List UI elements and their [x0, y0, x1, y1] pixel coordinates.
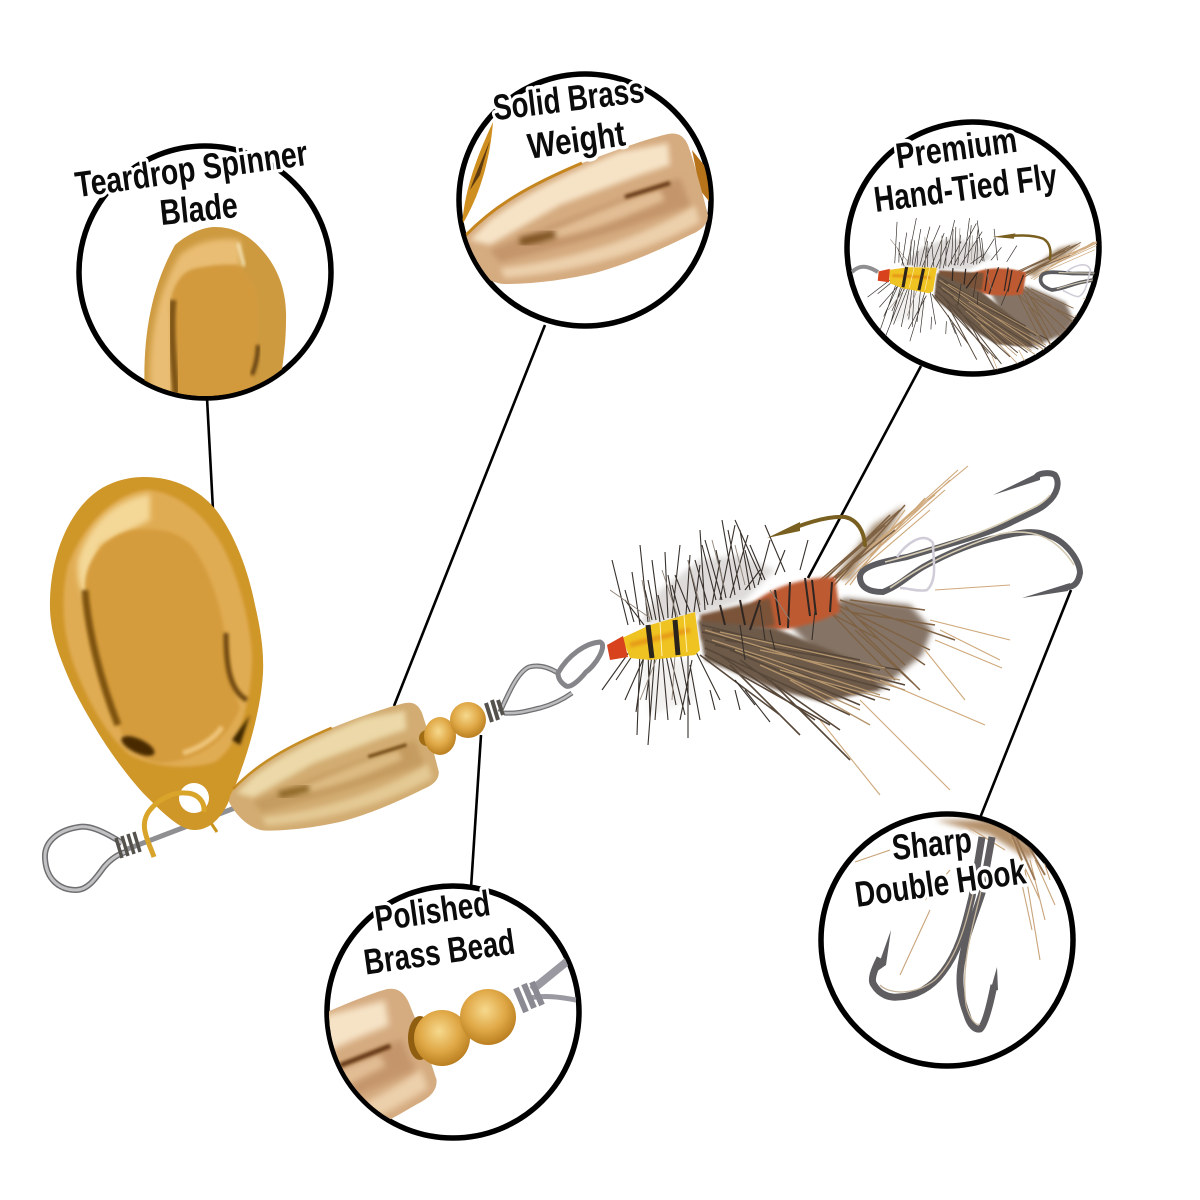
icon: blade close-up [144, 227, 286, 410]
leader line: hook [980, 590, 1071, 818]
icon: snap swivel [486, 642, 603, 722]
label: sharp double hook: Double Hook [852, 850, 1029, 915]
label: polished brass bead: Polished [372, 882, 493, 939]
callout: polished brass bead [324, 883, 582, 1141]
icon: hand-tied fly with double hook [602, 466, 1080, 795]
leader line: blade [207, 398, 213, 510]
label: solid brass weight: Weight [525, 113, 628, 167]
icon: spinner blade [50, 477, 263, 857]
label: sharp double hook [852, 819, 1029, 915]
label: premium hand-tied fly: Hand-Tied Fly [871, 155, 1059, 220]
callout: sharp double hook [821, 814, 1073, 1066]
icon: hook close-up [855, 820, 1055, 1029]
callout: premium hand-tied fly [844, 119, 1102, 377]
label: premium hand-tied fly [871, 119, 1059, 220]
leader line: bead [471, 735, 481, 888]
callout: teardrop spinner blade [73, 132, 331, 410]
label: polished brass bead: Brass Bead [361, 921, 517, 982]
icon: eyelet and shaft wire [45, 806, 240, 890]
label: polished brass bead [361, 882, 517, 982]
callout: solid brass weight [459, 69, 712, 326]
icon: brass beads [419, 702, 486, 755]
label: premium hand-tied fly: Premium [893, 119, 1020, 176]
label: solid brass weight: Solid Brass [491, 69, 646, 128]
label: teardrop spinner blade [73, 132, 310, 233]
leader line: fly [808, 366, 921, 578]
label: teardrop spinner blade: Teardrop Spinner [73, 132, 310, 205]
label: sharp double hook: Sharp [890, 819, 974, 868]
icon: bead close-up [329, 958, 576, 1120]
icon: fly close-up [851, 218, 1097, 370]
spinner lure illustration [45, 466, 1080, 890]
label: solid brass weight [491, 69, 646, 167]
icon: weight close-up [461, 122, 712, 284]
leader line: weight [394, 325, 545, 706]
icon: brass bullet weight [229, 703, 439, 831]
label: teardrop spinner blade: Blade [158, 184, 240, 233]
